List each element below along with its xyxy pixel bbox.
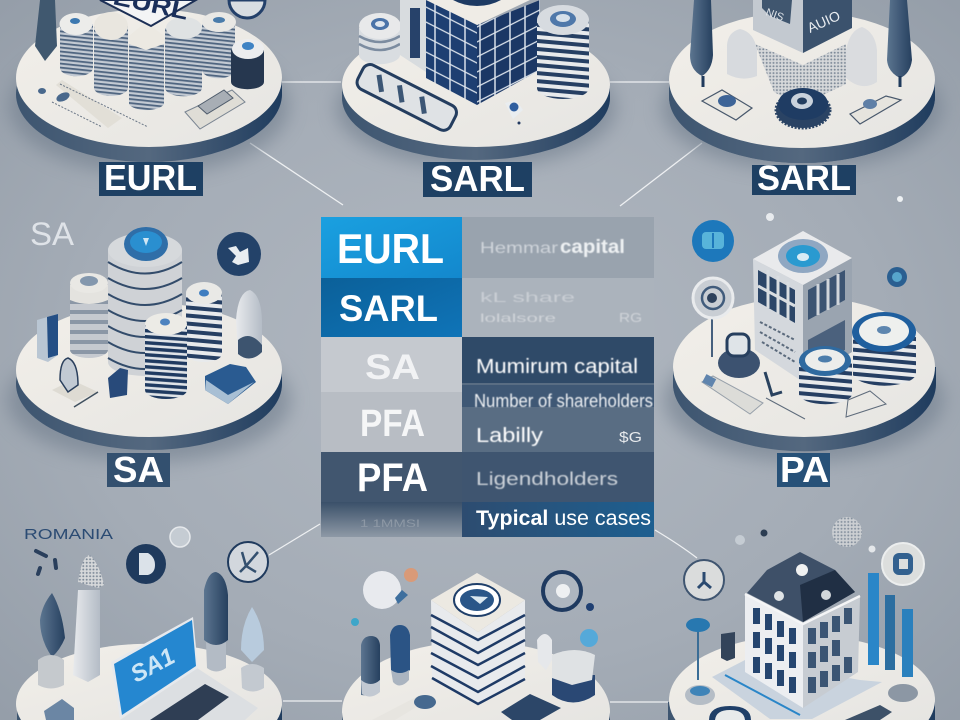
panel: SA platform middle left [7, 227, 291, 462]
dark capsule [204, 572, 228, 672]
row: EURL [321, 217, 654, 278]
capsule 1 [361, 636, 380, 697]
office tower [400, 0, 540, 105]
coin ring centre [715, 710, 745, 720]
cube: AUIO [805, 7, 843, 36]
halftone [755, 44, 846, 106]
laptop: SA1 [126, 643, 179, 688]
connector lines [250, 82, 702, 702]
row: SA: SA [365, 348, 420, 387]
front stack [799, 346, 852, 404]
panel: laptop platform bottom left [16, 526, 282, 720]
small shield [505, 100, 523, 124]
dark cup [721, 632, 735, 661]
floating ball [363, 568, 418, 609]
gear [776, 88, 830, 128]
coin stack 4 [165, 17, 202, 96]
blue ball [580, 629, 598, 647]
tag strip [354, 62, 459, 133]
label: SA small faint: SA [30, 216, 75, 252]
label: PA: PA [780, 449, 829, 490]
icon: ring [229, 0, 265, 18]
white bottle [537, 634, 552, 670]
label: EURL: EURL [104, 157, 197, 198]
row: typical use cases: Typical use cases [476, 507, 651, 530]
coin stack 2 [94, 12, 128, 96]
row: PFA light [321, 383, 654, 452]
row: SARL: kL share [480, 289, 575, 305]
row: PFA light: $G [619, 429, 642, 446]
small blue pillar [37, 314, 58, 362]
stamp [718, 334, 760, 378]
panel: EURL platform top left [9, 0, 289, 174]
row: SARL [321, 278, 654, 337]
panel: SARL platform top centre [336, 0, 616, 168]
label: ROMANIA: ROMANIA [24, 526, 113, 543]
dark ring [543, 572, 594, 611]
seal pedestal [52, 358, 98, 407]
note [372, 695, 428, 720]
cyan dot [351, 618, 359, 626]
left stack [70, 273, 108, 358]
book [501, 694, 561, 720]
windows right [808, 608, 852, 693]
EURL cube [100, 0, 196, 26]
row: SARL: lolalsore [480, 311, 557, 325]
row: typical use cases [321, 502, 654, 537]
grey bullet [236, 290, 262, 359]
panel: striped box platform bottom centre [342, 568, 610, 720]
row: EURL: EURL [337, 225, 444, 272]
large striped stack [537, 5, 589, 99]
coin stack 3 [129, 22, 164, 110]
keyboard card [702, 376, 763, 414]
cards [702, 90, 901, 124]
capsule 2 [390, 625, 410, 686]
townhouse [745, 552, 860, 708]
central tower [108, 233, 182, 376]
coin stack 1 [60, 13, 93, 76]
row: PFA dark: Ligendholders [476, 469, 618, 489]
dark circle icon [217, 232, 261, 276]
coin ring [709, 706, 751, 720]
panel: comparison table [321, 217, 654, 537]
icon: dark D circle [126, 544, 166, 584]
small coin stack [359, 13, 401, 64]
marks [36, 551, 56, 574]
row: SARL: RG [619, 310, 642, 325]
base mat [712, 660, 882, 719]
label: SA: SA [113, 449, 164, 490]
row: PFA dark [321, 452, 654, 502]
row: PFA dark: PFA [357, 456, 428, 500]
striped box [431, 573, 525, 705]
small knob object [888, 684, 918, 702]
icon: Y circle [684, 560, 724, 600]
trees [690, 0, 912, 87]
front stack [145, 313, 187, 399]
right stack [186, 282, 222, 362]
laptop [111, 617, 258, 720]
tall pale pillar [73, 555, 104, 682]
bars chart [868, 573, 913, 677]
label: SARL right: SARL [757, 159, 851, 198]
white dot [766, 213, 774, 221]
dot [897, 196, 903, 202]
cube: NIS [764, 7, 785, 24]
icon: spire [35, 0, 57, 61]
calculator [845, 705, 892, 720]
building [753, 231, 852, 382]
blue device [44, 699, 74, 720]
small items [735, 530, 876, 552]
panel: PA platform middle right [664, 213, 944, 462]
sign ring [693, 278, 733, 357]
row: typical use cases: 1 1MMSI [360, 518, 420, 530]
document left [38, 80, 148, 128]
small blue circle [887, 267, 907, 287]
pillars [727, 27, 877, 86]
icon: pale circle [170, 527, 190, 547]
pin sign [685, 618, 715, 705]
icon: ring Y circle [228, 542, 268, 582]
panel: townhouse platform bottom right [668, 517, 935, 720]
blue circle icon [692, 220, 734, 262]
panel: SARL platform top right [662, 0, 942, 170]
blue badge [124, 227, 168, 261]
small book [108, 368, 128, 398]
row: PFA light: Labilly [476, 425, 543, 447]
row: PFA light: PFA [360, 403, 425, 445]
feather and pot [241, 607, 264, 692]
dark leaf and pot [38, 593, 65, 688]
cube [753, 0, 852, 53]
label: SARL centre: SARL [430, 158, 525, 199]
row: SA: Mumirum capital [476, 356, 638, 378]
blue gem [205, 364, 256, 404]
coin stack 5 [202, 12, 236, 78]
icon: badge circle [882, 543, 924, 585]
row: SA [321, 337, 654, 392]
halftone patch [832, 517, 862, 547]
row: EURL: capital [560, 237, 625, 258]
windows left [753, 608, 796, 693]
dark cylinder [231, 39, 264, 89]
jar [552, 650, 595, 702]
big stack [852, 312, 916, 386]
row: SARL: SARL [339, 288, 438, 329]
row: EURL: Hemmar [480, 240, 559, 257]
card right [185, 90, 245, 129]
row: PFA light: Number of shareholders [474, 391, 653, 411]
